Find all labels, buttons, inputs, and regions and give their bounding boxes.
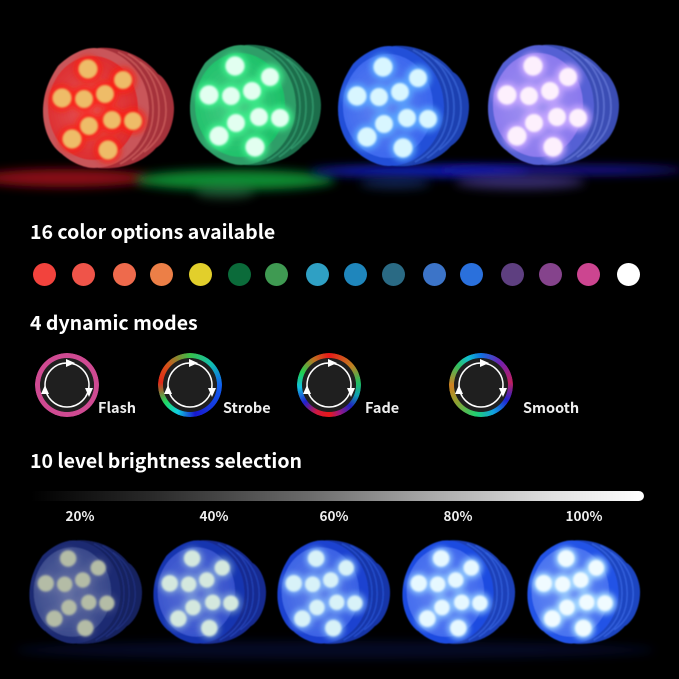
brightness labels: 60%	[320, 505, 348, 525]
lamp: red	[43, 48, 174, 168]
mode: smooth: Smooth	[523, 397, 579, 418]
brightness labels: 20%	[66, 505, 94, 525]
mode: strobe	[158, 353, 271, 418]
mode: strobe: Strobe	[223, 397, 271, 418]
lamp: purple	[488, 45, 619, 165]
mode: fade: Fade	[365, 397, 399, 418]
brightness lamp: 80%	[402, 540, 515, 644]
brightness lamp: 40%	[153, 540, 266, 644]
brightness labels: 80%	[444, 505, 472, 525]
brightness lamp: 60%	[277, 540, 390, 644]
mode: smooth	[449, 353, 579, 418]
mode: fade	[297, 353, 399, 418]
mode: flash: Flash	[98, 397, 136, 418]
heading: brightness: 10 level brightness selection	[30, 445, 302, 474]
heading: dynamic modes: 4 dynamic modes	[30, 307, 198, 336]
brightness labels	[66, 505, 602, 525]
mode: flash	[35, 353, 136, 418]
brightness gradient bar	[31, 491, 644, 501]
brightness labels: 100%	[566, 505, 602, 525]
brightness lamp: 20%	[29, 540, 142, 644]
heading: color options: 16 color options available	[30, 216, 275, 245]
lamp: blue	[338, 46, 469, 166]
brightness labels: 40%	[200, 505, 228, 525]
floor reflections	[0, 166, 679, 659]
color swatches	[33, 263, 640, 286]
lamp: green	[190, 45, 321, 165]
brightness lamp: 100%	[527, 540, 640, 644]
